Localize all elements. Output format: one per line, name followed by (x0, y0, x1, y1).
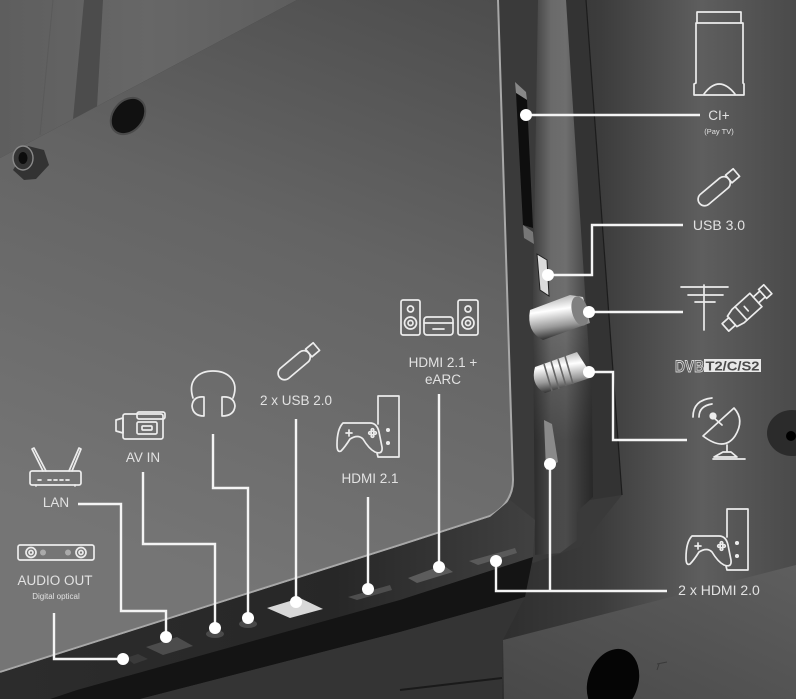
label: AV IN: AV IN (126, 450, 160, 465)
logo: DVB T2/C/S2: T2/C/S2 (706, 358, 760, 374)
icon: router (30, 448, 81, 486)
label: Digital optical: Digital optical (32, 592, 80, 601)
main back panel (0, 0, 513, 672)
dark side rail of TV (496, 0, 622, 563)
connector: AUDIO OUT line (54, 613, 129, 665)
label: Pay TV: (Pay TV) (704, 127, 734, 136)
connector: LAN line (78, 504, 172, 643)
label: 2 x USB 2.0: 2 x USB 2.0 (260, 393, 332, 408)
icon: gamepad and console small (337, 396, 399, 457)
label: 2 x HDMI 2.0: 2 x HDMI 2.0 (678, 582, 760, 598)
icon: video camera (116, 412, 165, 439)
connector: HDMI 2.1 eARC line (433, 394, 445, 573)
logo: DVB T2/C/S2 (675, 357, 761, 376)
label: USB 3.0: USB 3.0 (693, 217, 745, 233)
label: HDMI 2.1 + eARC: eARC (425, 372, 461, 387)
label: HDMI 2.1 + eARC: HDMI 2.1 + (409, 355, 477, 370)
connector: CI+ line (520, 109, 700, 121)
icon: speakers and soundbar (401, 300, 478, 335)
connector: HDMI 2.1 line (362, 497, 374, 595)
icon: CI+ card (694, 12, 744, 95)
connector: USB 3.0 line (542, 225, 683, 281)
connector: AV IN line (143, 472, 221, 634)
connector: antenna line (583, 306, 683, 318)
mounting holes and nut (13, 91, 796, 456)
label: AUDIO OUT: AUDIO OUT (17, 573, 93, 588)
connector: satellite line (583, 366, 687, 440)
icon: gamepad and console (686, 509, 748, 570)
connector: 2 x HDMI 2.0 lines (490, 458, 667, 591)
connector: USB 2.0 line (290, 419, 302, 608)
lower right panel (503, 565, 796, 699)
connector: headphones line (213, 434, 254, 624)
label: CI+: CI+ (708, 108, 730, 123)
label: HDMI 2.1: HDMI 2.1 (341, 471, 399, 486)
icon: coax plug (719, 283, 774, 334)
icon: antenna mast (681, 285, 728, 330)
bottom dark band with ports (0, 500, 535, 699)
side ports: CI slot, USB, coax connectors, HDMI (515, 82, 593, 470)
icon: audio soundbar (18, 545, 94, 560)
icon: USB stick small (275, 342, 321, 382)
icon: satellite dish (693, 398, 745, 459)
bottom ports (126, 548, 517, 664)
icon: headphones (191, 371, 235, 416)
label: LAN: LAN (43, 495, 69, 510)
icon: USB stick (695, 168, 741, 208)
logo: DVB T2/C/S2: DVB (675, 357, 704, 376)
